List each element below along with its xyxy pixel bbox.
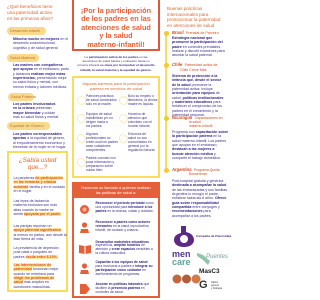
fact: depresion: La prevalencia de depresión — [14, 246, 59, 250]
fact: pandemia: aumentó familia y en el cuidado — [14, 185, 65, 189]
barrera 4 — [128, 112, 152, 128]
barrera 3 — [86, 112, 113, 128]
puentes name: Puentes — [206, 254, 228, 260]
pill: desarrollo infantil — [7, 27, 46, 35]
title: beneficios — [7, 4, 53, 21]
barrera 7: Padres cuentan con — [86, 156, 116, 160]
icon: documento — [80, 284, 90, 294]
barrera 3: los padres. — [86, 124, 102, 128]
heading: nicaragua: Nicaragua Capacitaciones en — [172, 115, 222, 120]
text: equidad de genero: bienestar de la mujer en el hogar. — [13, 145, 66, 149]
fact: depresion: post-natal o posparto en — [14, 250, 52, 254]
fact: intervenciones: salud más amplios en — [14, 280, 49, 284]
heading: nicaragua — [172, 115, 222, 128]
recomendacion 1: una oportunidad para introducir a los — [96, 205, 152, 209]
logo name: Campaña de Paternidad — [196, 234, 231, 238]
icon: barrera 1 — [77, 96, 86, 104]
recomendacion 3: atención y crear espacios sensibles a — [96, 247, 153, 251]
logo: campana de paternidad — [172, 225, 229, 250]
text: brasil: padre en controles prenatales, — [172, 45, 221, 49]
fact: lactancia: Las leyes de lactancia — [14, 199, 49, 203]
title: buenas practicas: promocionar la paternidad — [167, 17, 220, 22]
recomendacion 4: aseñoramiento de programas. — [96, 272, 140, 276]
fact: intervenciones: cuestiones masculinas. — [14, 285, 51, 289]
text: equidad de genero — [13, 132, 66, 149]
barrera 6: regulación laboral. — [128, 148, 155, 152]
text: brasil: promueve la participación del — [172, 40, 223, 44]
text: salud paterna: Los padres involucrados — [13, 102, 56, 106]
recomendacion 3: Desarrollar materiales educativos — [96, 240, 149, 244]
text: nicaragua: la participación paterna en la — [172, 134, 221, 138]
text: salud paterna: en la crianza presentan — [13, 106, 52, 110]
text: brasil: realizar y discutir exámenes para — [172, 49, 225, 53]
fact: intervenciones: cuando se entrelaza para — [14, 272, 54, 276]
recomendacion 5: faciliten la presencia paterna en — [96, 286, 145, 290]
heading: barreras: paterna en servicios de salud — [90, 86, 142, 91]
recomendacion 3 — [96, 240, 153, 255]
fact: lactancia: altas cuando la madre se — [14, 208, 54, 212]
title: buenas practicas: internacionales para — [167, 12, 208, 17]
text: argentina: Argentina lo recogió el padre, — [172, 192, 219, 196]
barrera 1: de salud construidos — [86, 98, 117, 102]
timeline dot: chile — [164, 63, 168, 68]
heading: chile: Chile Crece Más — [180, 68, 207, 72]
logo: g text: género — [211, 284, 219, 287]
intro paragraph: primera infancia es clave por la impulsar el desarrollo — [77, 63, 155, 67]
pill: salud materna: Salud Materna — [10, 55, 35, 60]
heading: brasil: Brasil Prenatal de Parceiro — [172, 30, 219, 35]
text: nicaragua: Programa con capacitación sobre — [172, 130, 228, 134]
text: salud paterna: mayor bienestar y cuidan — [13, 111, 55, 115]
fact: pandemia: en las hembras y crianza — [14, 180, 56, 184]
logo: g text: y biología — [211, 287, 222, 290]
logo: mencare: care — [172, 257, 191, 267]
timeline dot: argentina — [164, 168, 168, 173]
timeline dot: brasil — [164, 31, 168, 36]
pill: salud materna — [7, 54, 39, 62]
red banner: las políticas de salud a: — [96, 190, 136, 195]
barrera 3: Equipos de salud — [86, 112, 112, 116]
barrera 4: atención que — [128, 116, 147, 120]
fact: apoyo: Las parejas reportan un — [14, 224, 51, 228]
fact: intervenciones: paternidad funcionan mejor — [14, 267, 58, 271]
text: chile: paternidad personal. — [172, 113, 205, 117]
icon: barrera 4 — [119, 114, 128, 123]
text: argentina: guía sobre responsabilidad — [172, 201, 219, 205]
barrera 4: horario laboral. — [128, 124, 150, 128]
barrera 7: poca información y — [86, 160, 114, 164]
recomendacion 1: Reconocer el período perinatal como — [96, 201, 154, 205]
barrera 2: itinerarios, la clínica — [128, 98, 157, 102]
main title: de los padres en las — [81, 14, 151, 23]
barrera 6: general por la — [128, 144, 148, 148]
text: desarrollo infantil: Mitocha mucho en mejores en el — [13, 37, 68, 41]
fact: depresion: padres oscila entre 8-10%. — [14, 255, 58, 259]
fact: apoyo: apoyo paternal significativo — [14, 228, 61, 232]
barrera 5: creen-cuál los padres — [86, 140, 118, 144]
barrera 5 — [86, 132, 118, 152]
fact: intervenciones: dirigir los problemas de — [14, 276, 54, 280]
main title: y la salud — [99, 31, 133, 40]
text: salud materna: que apoyan en el embarazo, parto — [13, 67, 69, 71]
barrera 1: Patrones prácticos — [86, 94, 114, 98]
logo: g text: Salud, — [211, 281, 218, 284]
barrera 3: invisibilizan y/o no — [86, 116, 113, 120]
fact: lactancia: materna exclusiva son más — [14, 203, 57, 207]
fact: apoyo: fase tierna de vida. — [14, 237, 44, 241]
recomendacion 2 — [96, 220, 150, 232]
fact: lactancia — [14, 199, 61, 216]
text: chile: padres en el crecimiento y la — [172, 109, 218, 113]
logo: mencare: men — [172, 249, 191, 259]
fact: depresion — [14, 246, 59, 259]
recomendacion 2: relevantes en la salud reproductiva, — [96, 224, 149, 228]
icon: libro — [79, 245, 91, 254]
barrera 4: Horarios de — [128, 112, 145, 116]
recomendacion 4: Capacitar a los equipos de salud — [96, 260, 148, 264]
text: argentina: de las embarazadas y sus familias. — [172, 188, 228, 192]
fact: apoyo: al menos en partos, aún desde la — [14, 233, 67, 237]
red banner: Hacemos un llamado a quienes realizan — [81, 185, 151, 190]
text: chile: paternidad activa. Incluye — [172, 87, 213, 91]
heading: chile — [172, 62, 218, 72]
logo: masc3: MasC3 — [199, 268, 220, 275]
heading: argentina: Bonaerense — [189, 172, 207, 176]
title: buenas practicas: en atenciones de salud — [167, 23, 214, 28]
brasil — [172, 30, 225, 57]
text: salud materna: su salud física y mental, con — [13, 80, 58, 84]
title: beneficios: una paternidad activa — [7, 10, 52, 15]
title: buenas practicas — [167, 6, 220, 28]
text: chile: y materiales educativos para — [172, 100, 221, 104]
recomendacion 1: padres en la crianza, cuidar y cuidado. — [96, 209, 154, 213]
text: argentina: Post-hospital gratuita y genérica — [172, 179, 223, 183]
logo: g: G — [199, 279, 208, 291]
barrera 2: madre es líquida. — [128, 102, 154, 106]
barrera 5: competentes. — [86, 148, 106, 152]
timeline dot: nicaragua — [164, 116, 168, 121]
barrera 1 — [86, 94, 117, 106]
recomendacion 4: para involucrar a padres e integrar su — [96, 264, 153, 268]
barrera 6: comunitarios en — [128, 140, 152, 144]
heading: sabia usted que: que...? — [28, 164, 47, 171]
recomendacion 4: participación como cuidador en — [96, 268, 146, 272]
fact: pandemia — [14, 176, 65, 193]
barrera 7: cuidar bien. — [86, 168, 103, 172]
text: chile: fortalecer el compromiso de los — [172, 104, 222, 108]
barrera 6 — [128, 132, 155, 152]
main title: materno-infantil! — [87, 40, 145, 49]
barrera 5: profesionales no — [86, 136, 111, 140]
intro paragraph — [77, 55, 155, 72]
fact: pandemia: en el hogar. — [14, 189, 32, 193]
text: nicaragua: destacan a las mujeres a — [172, 147, 214, 151]
logo: g text — [211, 281, 222, 291]
text: argentina: enfatizar hasta las 8 años. Ofrece — [172, 196, 226, 200]
recomendacion 1 — [96, 201, 154, 213]
heading: barreras — [82, 81, 150, 91]
title box — [72, 0, 160, 51]
heading: barreras: Algunas barreras para la participación — [82, 81, 150, 86]
text: salud materna — [13, 63, 69, 89]
text: equidad de genero: al empoderamiento económico y — [13, 141, 65, 145]
main title: atenciones de salud — [81, 23, 151, 32]
barrera 3: dirigen hacia a — [86, 120, 108, 124]
heading: nicaragua: la salud — [189, 120, 201, 124]
heading: sabia usted que — [18, 157, 56, 171]
recomendacion 4 — [96, 260, 153, 276]
heading: argentina — [172, 168, 220, 177]
text: desarrollo infantil: cognitivo y de salud general. — [13, 46, 59, 50]
intro paragraph: infantil, la salud materna y la equidad de género. — [80, 68, 152, 72]
text: salud materna: Las madres con compañeros — [13, 63, 63, 67]
chile — [172, 62, 224, 117]
text: salud materna: experiencias, presentando mejor — [13, 76, 67, 80]
text: argentina: destinada a acompañar la salud — [172, 183, 226, 187]
text: nicaragua: salud materno-infantil. Los padres — [172, 139, 226, 143]
logo: puentes — [197, 252, 227, 266]
text: argentina — [172, 179, 228, 218]
fact: intervenciones — [14, 263, 58, 289]
fact: lactancia: siente apoyada por el padre. — [14, 212, 61, 216]
text: equidad de genero: aportan a la equidad de género, — [13, 136, 65, 140]
icon: persona 2 — [80, 263, 89, 274]
argentina — [171, 167, 173, 169]
text: nicaragua: buscar atención médica y — [172, 152, 216, 156]
barrera 1: solo en la madre. — [86, 102, 112, 106]
recomendacion 5 — [96, 282, 150, 294]
text: brasil: abordar la salud paternal. — [172, 53, 213, 57]
title: beneficios: ¿Qué beneficios tiene — [7, 4, 53, 9]
timeline — [165, 32, 167, 172]
barrera 2: Bolo su empleo o — [128, 94, 154, 98]
text: brasil: Estrategia nacional que — [172, 36, 212, 40]
heading: chile: Chile Paternidad activa de — [172, 62, 217, 67]
logo: mencare — [172, 251, 198, 268]
text: chile: de la salud promueve la — [172, 83, 211, 87]
text: salud paterna — [13, 102, 59, 119]
text: salud paterna: más su salud física y mental. — [13, 115, 59, 119]
panel: llamado — [72, 198, 160, 298]
panel: barreras — [72, 76, 160, 178]
recomendacion 2: Reconocer a padres como actores — [96, 220, 150, 224]
text: salud materna: menos énfasis y labores médicas. — [13, 85, 67, 89]
icon: barrera 6 — [119, 134, 128, 143]
text: chile: salud, políticas institucionales — [172, 96, 223, 100]
text: equidad de genero: Los padres corresponsables — [13, 132, 62, 136]
recomendacion 5: Asociar en políticas laborales que — [96, 282, 149, 286]
intro paragraph: atenciones de salud básica y embarazo hasta su — [83, 59, 149, 63]
logo: ehe — [172, 274, 202, 284]
title: buenas practicas: Buenas prácticas — [167, 6, 202, 11]
icon: barrera 3 — [77, 114, 86, 123]
text: argentina: acompañar a los padres. — [172, 214, 212, 218]
barrera 5: sean cuidadores — [86, 144, 111, 148]
title: beneficios: en las primeras años? — [7, 16, 53, 21]
recomendacion 5: controles de salud. — [96, 290, 124, 294]
red banner — [72, 182, 160, 198]
recomendacion 3: la cultura masculina. — [96, 251, 126, 255]
barrera 6: Entornos de — [128, 132, 146, 136]
barrera 7 — [86, 156, 116, 172]
fact: apoyo — [14, 224, 67, 241]
text: chile: Sistema de protección a la — [172, 74, 217, 78]
text: desarrollo infantil — [13, 37, 68, 50]
text: desarrollo infantil: desarrollo socioemocional, — [13, 41, 56, 45]
logo mark — [173, 225, 195, 247]
pill: equidad de genero — [7, 122, 50, 130]
pill: desarrollo infantil: Desarrollo infantil — [10, 28, 40, 33]
text: nicaragua — [172, 130, 228, 160]
text: salud materna: y lactancia realizan mejor estas — [13, 72, 65, 76]
panel: sabia usted que — [7, 151, 68, 292]
text: argentina: recomendaciones para — [172, 209, 211, 213]
icon: barrera 2 — [119, 96, 128, 104]
icon: persona 1 — [80, 222, 89, 233]
heading: nicaragua: materno-infantil — [189, 124, 212, 128]
text: chile: orientación para equipos de — [172, 91, 220, 95]
nicaragua — [172, 115, 228, 160]
text: argentina: compartida entre cónyuges y — [172, 205, 220, 209]
pill: salud paterna: Salud Paterna — [11, 94, 36, 99]
barrera 5: Algunos — [86, 132, 98, 136]
pill: equidad de genero: Equidad de Género — [10, 123, 44, 128]
barrera 4: coinciden con el — [128, 120, 152, 124]
map mark — [197, 252, 211, 266]
barrera 7: preparación sobre — [86, 164, 113, 168]
fact: intervenciones: Las intervenciones de — [14, 263, 51, 267]
pill: salud paterna — [8, 93, 34, 101]
main title — [81, 6, 151, 49]
text: chile — [172, 74, 224, 117]
recomendacion 3: específicos, ampliar horarios de — [96, 243, 145, 247]
text: nicaragua: que apoyan en el embarazo, — [172, 143, 218, 147]
text: nicaragua: compartir el trabajo doméstico. — [172, 156, 221, 160]
main title: ¡Por la participación — [81, 6, 151, 15]
icon: barrera 5 — [77, 134, 86, 143]
text: chile: infancia que, desde el sector — [172, 78, 221, 82]
icon: reloj — [80, 205, 89, 214]
fact: pandemia: La pandemia de participación — [14, 176, 63, 180]
barrera 2 — [128, 94, 158, 106]
intro paragraph: La participación activa de los padres en las — [84, 55, 148, 59]
icon: barrera 7 — [77, 158, 86, 167]
barrera 6: salud no son — [128, 136, 147, 140]
text: brasil — [172, 36, 225, 57]
heading: sabia usted que: ¿Sabía usted — [19, 157, 56, 164]
recomendacion 2: infantil, de cuidado y crianza. — [96, 228, 139, 232]
heading: argentina: Argentina Programa Qunita — [172, 167, 220, 172]
